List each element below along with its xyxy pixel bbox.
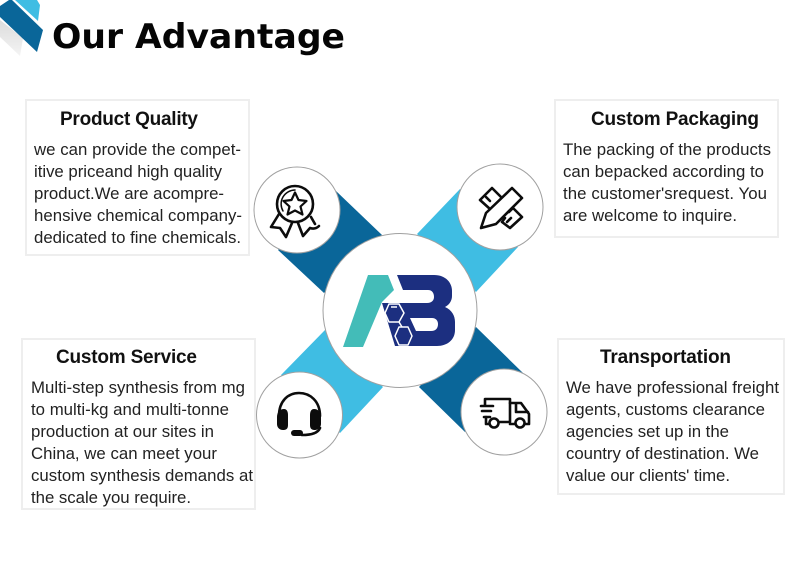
icon: headset: [277, 393, 321, 436]
heading: custom packaging: Custom Packaging: [591, 109, 759, 130]
text block: custom service: to multi-kg and multi-tonne: [31, 400, 229, 419]
text block: custom packaging: The packing of the products: [563, 140, 771, 159]
text block: custom service: production at our sites in: [31, 422, 214, 441]
panel: custom packaging: [555, 100, 778, 237]
text block: transportation: We have professional freight: [566, 378, 779, 397]
icon: pencil and ruler: [480, 188, 522, 228]
centre circle with logo: [323, 234, 477, 388]
text block: product quality: [33, 140, 242, 247]
icon circle: delivery truck: [461, 369, 547, 455]
text block: custom packaging: [563, 140, 771, 225]
icon: award badge: [271, 186, 319, 237]
ribbon: bottom-left light blue: [281, 330, 383, 433]
ribbon: top-left dark blue: [278, 191, 382, 293]
text block: transportation: value our clients' time.: [566, 466, 730, 485]
panel: transportation: [558, 339, 784, 494]
heading: custom service: Custom Service: [56, 347, 197, 368]
text block: custom packaging: are welcome to inquire.: [563, 206, 737, 225]
text block: custom packaging: the customer'srequest. You: [563, 184, 767, 203]
icon: corner ribbon decoration: [0, 0, 43, 56]
text block: transportation: agents, customs clearance: [566, 400, 765, 419]
icon circle: headset: [256, 372, 342, 458]
icon circle: award badge: [254, 167, 340, 253]
panel: product quality: [26, 100, 249, 255]
text block: transportation: [566, 378, 779, 485]
title: Our Advantage: [52, 17, 345, 57]
logo: teal A: [343, 275, 394, 347]
ribbon: bottom-right dark blue: [419, 327, 523, 432]
text block: product quality: dedicated to fine chemicals.: [34, 228, 241, 247]
panel: custom service: [22, 339, 255, 509]
text block: product quality: itive priceand high quality: [34, 162, 223, 181]
text block: product quality: hensive chemical company-: [34, 206, 242, 225]
text block: custom packaging: can bepacked according to: [563, 162, 764, 181]
heading: product quality: Product Quality: [60, 109, 198, 130]
icon: delivery truck: [481, 399, 529, 428]
text block: transportation: agencies set up in the: [566, 422, 729, 441]
heading: transportation: Transportation: [600, 347, 731, 368]
text block: custom service: Multi-step synthesis from mg: [31, 378, 245, 397]
text block: custom service: the scale you require.: [31, 488, 191, 507]
text block: transportation: country of destination. We: [566, 444, 759, 463]
text block: custom service: custom synthesis demands at: [31, 466, 253, 485]
text block: custom service: [31, 378, 253, 507]
logo: navy B with hexagons: [382, 275, 455, 346]
text block: product quality: we can provide the compet-: [33, 140, 241, 159]
ribbon: top-right light blue: [417, 189, 518, 292]
text block: product quality: product.We are acompre-: [34, 184, 224, 203]
text block: custom service: China, we can meet your: [31, 444, 217, 463]
icon circle: pencil and ruler: [457, 164, 543, 250]
